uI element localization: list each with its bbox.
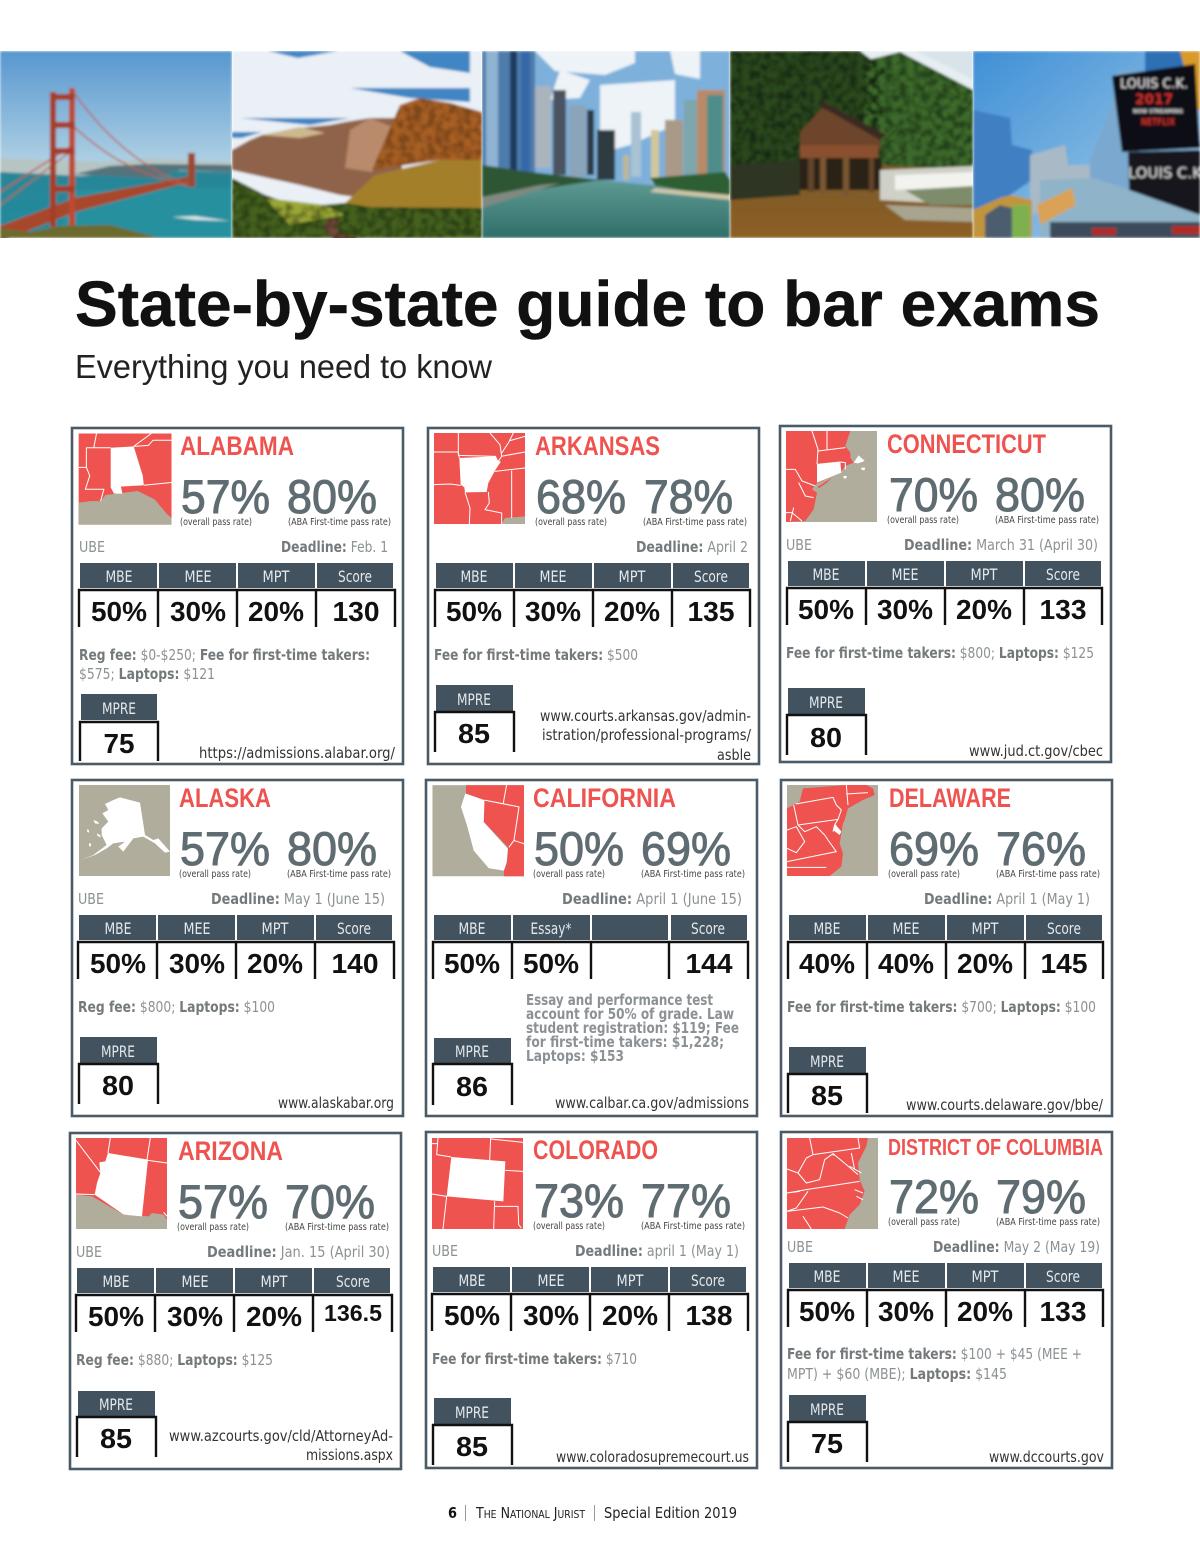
score table	[788, 1263, 1103, 1327]
score table: 140	[332, 948, 378, 979]
score table: Score	[691, 1271, 725, 1290]
score table: 50%	[444, 948, 500, 979]
website: www.coloradosupremecourt.us	[556, 1448, 749, 1466]
footer	[448, 1504, 737, 1522]
score table: Score	[337, 919, 371, 938]
score table: 20%	[246, 1301, 302, 1332]
score table	[78, 915, 394, 979]
panel: District of Columbia: (ABA First-time pass rate)	[996, 1217, 1100, 1228]
score table: 133	[1040, 594, 1086, 625]
deadline: Deadline: Feb. 1	[281, 538, 388, 556]
score table: 20%	[248, 596, 304, 627]
score table: 40%	[799, 948, 855, 979]
exam type: UBE	[432, 1242, 458, 1260]
first-time pass rate: 76%	[996, 822, 1086, 875]
footer: Special Edition 2019	[604, 1504, 737, 1522]
exam type: UBE	[786, 536, 812, 554]
map: Arkansas	[434, 433, 525, 524]
panel: Arizona: (overall pass rate)	[177, 1222, 249, 1233]
score table: 50%	[798, 594, 854, 625]
deadline: Deadline: March 31 (April 30)	[904, 536, 1098, 554]
photo: Golden Gate Bridge	[0, 51, 232, 242]
score table: MPT	[260, 1272, 288, 1291]
map: Connecticut	[786, 431, 877, 522]
panel: Alabama: (ABA First-time pass rate)	[288, 517, 391, 528]
panel: Alaska	[72, 780, 403, 1116]
MPRE score	[79, 1037, 158, 1104]
photo: Times Square billboards: NETFLIX	[1141, 117, 1175, 128]
MPRE score: MPRE	[457, 690, 491, 709]
score table: MBE	[458, 919, 486, 938]
fees: Fee for first-time takers: $700; Laptops: $100	[787, 998, 1096, 1016]
fees: Fee for first-time takers: $710	[432, 1350, 637, 1368]
panel: Connecticut: (overall pass rate)	[887, 515, 959, 526]
score table: MBE	[104, 919, 132, 938]
overall pass rate: 73%	[534, 1174, 624, 1227]
website: www.courts.delaware.gov/bbe/	[906, 1096, 1104, 1114]
score table	[787, 561, 1102, 625]
score table: 50%	[523, 948, 579, 979]
score table: MEE	[184, 567, 212, 586]
exam type: UBE	[78, 890, 104, 908]
fees: MPT) + $60 (MBE); Laptops: $145	[787, 1365, 1007, 1383]
score table: 50%	[799, 1296, 855, 1327]
deadline: Deadline: April 1 (May 1)	[924, 890, 1090, 908]
panel: Arkansas	[428, 428, 759, 764]
MPRE score	[433, 1398, 512, 1465]
map: California	[432, 785, 524, 876]
score table: 30%	[878, 1296, 934, 1327]
MPRE score: 80	[810, 722, 842, 753]
score table	[788, 915, 1103, 979]
score table: MBE	[814, 1267, 840, 1286]
MPRE score: MPRE	[809, 693, 843, 712]
MPRE score	[435, 685, 514, 752]
website: www.jud.ct.gov/cbec	[969, 742, 1103, 760]
score table: 50%	[444, 1300, 500, 1331]
score table: 30%	[167, 1301, 223, 1332]
exam type: UBE	[79, 538, 105, 556]
first-time pass rate: 77%	[641, 1174, 731, 1227]
panel: Arkansas: (overall pass rate)	[535, 517, 607, 528]
score table: MPT	[616, 1271, 644, 1290]
fees and grading note: Essay and performance test	[526, 991, 713, 1009]
panel: California: (ABA First-time pass rate)	[641, 869, 745, 880]
MPRE score	[80, 694, 158, 761]
map: Alabama	[79, 434, 172, 525]
score table: 50%	[446, 596, 502, 627]
MPRE score: 86	[456, 1071, 488, 1102]
score table: MPT	[618, 567, 646, 586]
first-time pass rate: 78%	[644, 470, 733, 523]
MPRE score: 85	[458, 718, 490, 749]
score table	[79, 563, 395, 627]
deadline: Deadline: April 1 (June 15)	[562, 890, 742, 908]
first-time pass rate: 80%	[287, 470, 377, 523]
deadline: Deadline: April 2	[636, 538, 748, 556]
MPRE score: 80	[102, 1070, 134, 1101]
fees and grading note: for first-time takers: $1,228;	[526, 1033, 724, 1051]
score table: MEE	[538, 1271, 564, 1290]
panel: Colorado: (ABA First-time pass rate)	[641, 1221, 745, 1232]
panel: Arizona: (ABA First-time pass rate)	[285, 1222, 389, 1233]
score table: MBE	[102, 1272, 130, 1291]
website: istration/professional-programs/	[542, 726, 752, 744]
fees	[787, 1345, 1082, 1383]
MPRE score: 85	[100, 1423, 132, 1454]
panel: District of Columbia	[781, 1132, 1112, 1468]
website: www.dccourts.gov	[989, 1448, 1104, 1466]
photo: red rock canyon	[232, 51, 482, 245]
panel: Alaska: (overall pass rate)	[179, 869, 251, 880]
state name: ALABAMA	[180, 431, 294, 461]
state name: ALASKA	[179, 783, 271, 813]
map: Delaware	[787, 785, 878, 876]
score table: 40%	[878, 948, 934, 979]
panel: California	[426, 780, 757, 1116]
score table: 20%	[956, 594, 1012, 625]
overall pass rate: 70%	[889, 468, 978, 521]
MPRE score: MPRE	[455, 1042, 489, 1061]
state name: DISTRICT OF COLUMBIA	[888, 1134, 1103, 1160]
score table: 30%	[877, 594, 933, 625]
score table: MEE	[892, 1267, 920, 1286]
panel: Alabama	[72, 428, 403, 764]
deadline: Deadline: april 1 (May 1)	[575, 1242, 739, 1260]
score table: 20%	[957, 1296, 1013, 1327]
photo banner	[0, 51, 1200, 245]
website: www.calbar.ca.gov/admissions	[555, 1094, 749, 1112]
map: Alaska	[79, 785, 170, 876]
state name: ARKANSAS	[535, 431, 660, 461]
exam type: UBE	[76, 1243, 102, 1261]
state name: COLORADO	[533, 1135, 658, 1165]
deadline: Deadline: May 1 (June 15)	[211, 890, 385, 908]
fees and grading note: account for 50% of grade. Law	[526, 1005, 734, 1023]
score table: 135	[688, 596, 734, 627]
fees: Fee for first-time takers: $100 + $45 (MEE +	[787, 1345, 1082, 1363]
MPRE score: MPRE	[99, 1395, 133, 1414]
score table: 133	[1040, 1296, 1086, 1327]
MPRE score: 75	[104, 728, 134, 759]
website: www.alaskabar.org	[278, 1094, 394, 1112]
score table: 20%	[602, 1300, 658, 1331]
website: missions.aspx	[306, 1446, 393, 1464]
website: asble	[717, 746, 751, 764]
MPRE score: 75	[811, 1428, 843, 1459]
MPRE score	[77, 1391, 156, 1457]
map: Colorado	[432, 1138, 523, 1229]
panel: Arkansas: (ABA First-time pass rate)	[643, 517, 747, 528]
MPRE score: 85	[811, 1080, 843, 1111]
score table: 20%	[247, 948, 303, 979]
subtitle: Everything you need to know	[75, 348, 492, 385]
overall pass rate: 57%	[181, 470, 270, 523]
score table: MBE	[814, 919, 840, 938]
score table: 145	[1040, 948, 1088, 979]
score table	[76, 1268, 392, 1332]
panel: Alabama: (overall pass rate)	[180, 517, 252, 528]
score table: Score	[1046, 565, 1080, 584]
map: District of Columbia	[787, 1138, 878, 1229]
panel: District of Columbia: (overall pass rate)	[888, 1217, 960, 1228]
first-time pass rate: 69%	[641, 822, 731, 875]
score table: 136.5	[324, 1300, 382, 1326]
score table: Essay*	[530, 919, 572, 938]
deadline: Deadline: May 2 (May 19)	[933, 1238, 1100, 1256]
panel: Alaska: (ABA First-time pass rate)	[287, 869, 391, 880]
score table: MBE	[458, 1271, 486, 1290]
photo: Times Square billboards: 2017	[1135, 92, 1173, 108]
photo: Times Square billboards: NOW STREAMING	[1133, 109, 1183, 115]
first-time pass rate: 79%	[996, 1170, 1086, 1223]
fees: $575; Laptops: $121	[79, 665, 215, 683]
MPRE score: MPRE	[810, 1052, 844, 1071]
score table: MPT	[972, 919, 999, 938]
fees: Reg fee: $880; Laptops: $125	[76, 1351, 273, 1369]
score table: Score	[1046, 1267, 1080, 1286]
photo: Times Square billboards: LOUIS C.K.	[1120, 77, 1188, 92]
score table: MPT	[972, 1267, 999, 1286]
MPRE score: MPRE	[810, 1400, 844, 1419]
MPRE score: MPRE	[101, 1042, 135, 1061]
score table: Score	[691, 919, 725, 938]
first-time pass rate: 70%	[285, 1175, 375, 1228]
state name: DELAWARE	[889, 783, 1011, 813]
score table: 30%	[523, 1300, 579, 1331]
overall pass rate: 68%	[536, 470, 626, 523]
score table: MBE	[812, 565, 840, 584]
panel: Delaware: (ABA First-time pass rate)	[996, 869, 1100, 880]
score table: 50%	[88, 1301, 144, 1332]
score table: 50%	[90, 948, 146, 979]
score table: 130	[332, 596, 380, 627]
MPRE score: MPRE	[102, 699, 136, 718]
score table: MEE	[540, 567, 566, 586]
map: Arizona	[76, 1138, 167, 1229]
score table: MEE	[184, 919, 210, 938]
MPRE score	[788, 1047, 867, 1113]
photo: wooden mill and waterfall	[730, 51, 973, 238]
fees: Reg fee: $0-$250; Fee for first-time takers:	[79, 646, 370, 664]
fees	[79, 646, 370, 683]
score table	[435, 563, 750, 627]
exam type: UBE	[787, 1238, 813, 1256]
fees and grading note	[526, 991, 739, 1065]
score table: 138	[686, 1300, 732, 1331]
first-time pass rate: 80%	[995, 468, 1085, 521]
overall pass rate: 69%	[889, 822, 979, 875]
fees and grading note: Laptops: $153	[526, 1047, 624, 1065]
overall pass rate: 50%	[534, 822, 624, 875]
footer: THE NATIONAL JURIST	[475, 1504, 585, 1522]
panel: California: (overall pass rate)	[533, 869, 605, 880]
MPRE score	[787, 688, 866, 755]
score table: MBE	[106, 567, 132, 586]
score table	[432, 1267, 748, 1331]
state name: ARIZONA	[178, 1136, 283, 1166]
photo: Times Square billboards	[973, 51, 1200, 238]
score table	[433, 915, 748, 979]
website: https://admissions.alabar.org/	[199, 744, 396, 762]
panel: Arizona	[70, 1133, 401, 1469]
footer: 6	[448, 1504, 457, 1522]
overall pass rate: 57%	[178, 1175, 268, 1228]
fees: Fee for first-time takers: $500	[434, 646, 638, 664]
MPRE score	[433, 1038, 512, 1105]
state name: CONNECTICUT	[887, 429, 1046, 459]
panel: Colorado: (overall pass rate)	[533, 1221, 605, 1232]
score table: Score	[338, 567, 372, 586]
score table: MPT	[970, 565, 998, 584]
panel: Connecticut	[780, 426, 1111, 762]
score table: 20%	[957, 948, 1013, 979]
MPRE score	[788, 1395, 867, 1462]
website: www.courts.arkansas.gov/admin-	[540, 707, 751, 725]
score table: MPT	[262, 567, 290, 586]
website	[169, 1427, 393, 1464]
MPRE score: MPRE	[455, 1403, 489, 1422]
score table: 30%	[525, 596, 581, 627]
score table: 20%	[604, 596, 660, 627]
photo: Chicago river skyline	[482, 51, 730, 238]
score table: 30%	[170, 596, 226, 627]
fees and grading note: student registration: $119; Fee	[526, 1019, 739, 1037]
state name: CALIFORNIA	[533, 783, 676, 813]
deadline: Deadline: Jan. 15 (April 30)	[207, 1243, 390, 1261]
score table: Score	[694, 567, 728, 586]
score table: MPT	[262, 919, 289, 938]
panel: Delaware	[781, 780, 1112, 1116]
score table: Score	[336, 1272, 370, 1291]
score table: MBE	[460, 567, 488, 586]
overall pass rate: 57%	[180, 822, 270, 875]
website: www.azcourts.gov/cld/AttorneyAd-	[169, 1427, 393, 1445]
website	[540, 707, 752, 764]
MPRE score: 85	[456, 1431, 488, 1462]
score table: 30%	[169, 948, 225, 979]
panel: Connecticut: (ABA First-time pass rate)	[995, 515, 1099, 526]
score table: MEE	[892, 919, 920, 938]
overall pass rate: 72%	[889, 1170, 979, 1223]
panel: Colorado	[426, 1132, 757, 1468]
fees: Reg fee: $800; Laptops: $100	[78, 998, 275, 1016]
score table: Score	[1047, 919, 1081, 938]
score table: MEE	[182, 1272, 208, 1291]
fees: Fee for first-time takers: $800; Laptops: $125	[786, 644, 1094, 662]
first-time pass rate: 80%	[287, 822, 377, 875]
score table: 144	[686, 948, 733, 979]
score table: MEE	[892, 565, 918, 584]
panel: Delaware: (overall pass rate)	[888, 869, 960, 880]
title: State-by-state guide to bar exams	[75, 268, 1100, 340]
score table: 50%	[91, 596, 147, 627]
